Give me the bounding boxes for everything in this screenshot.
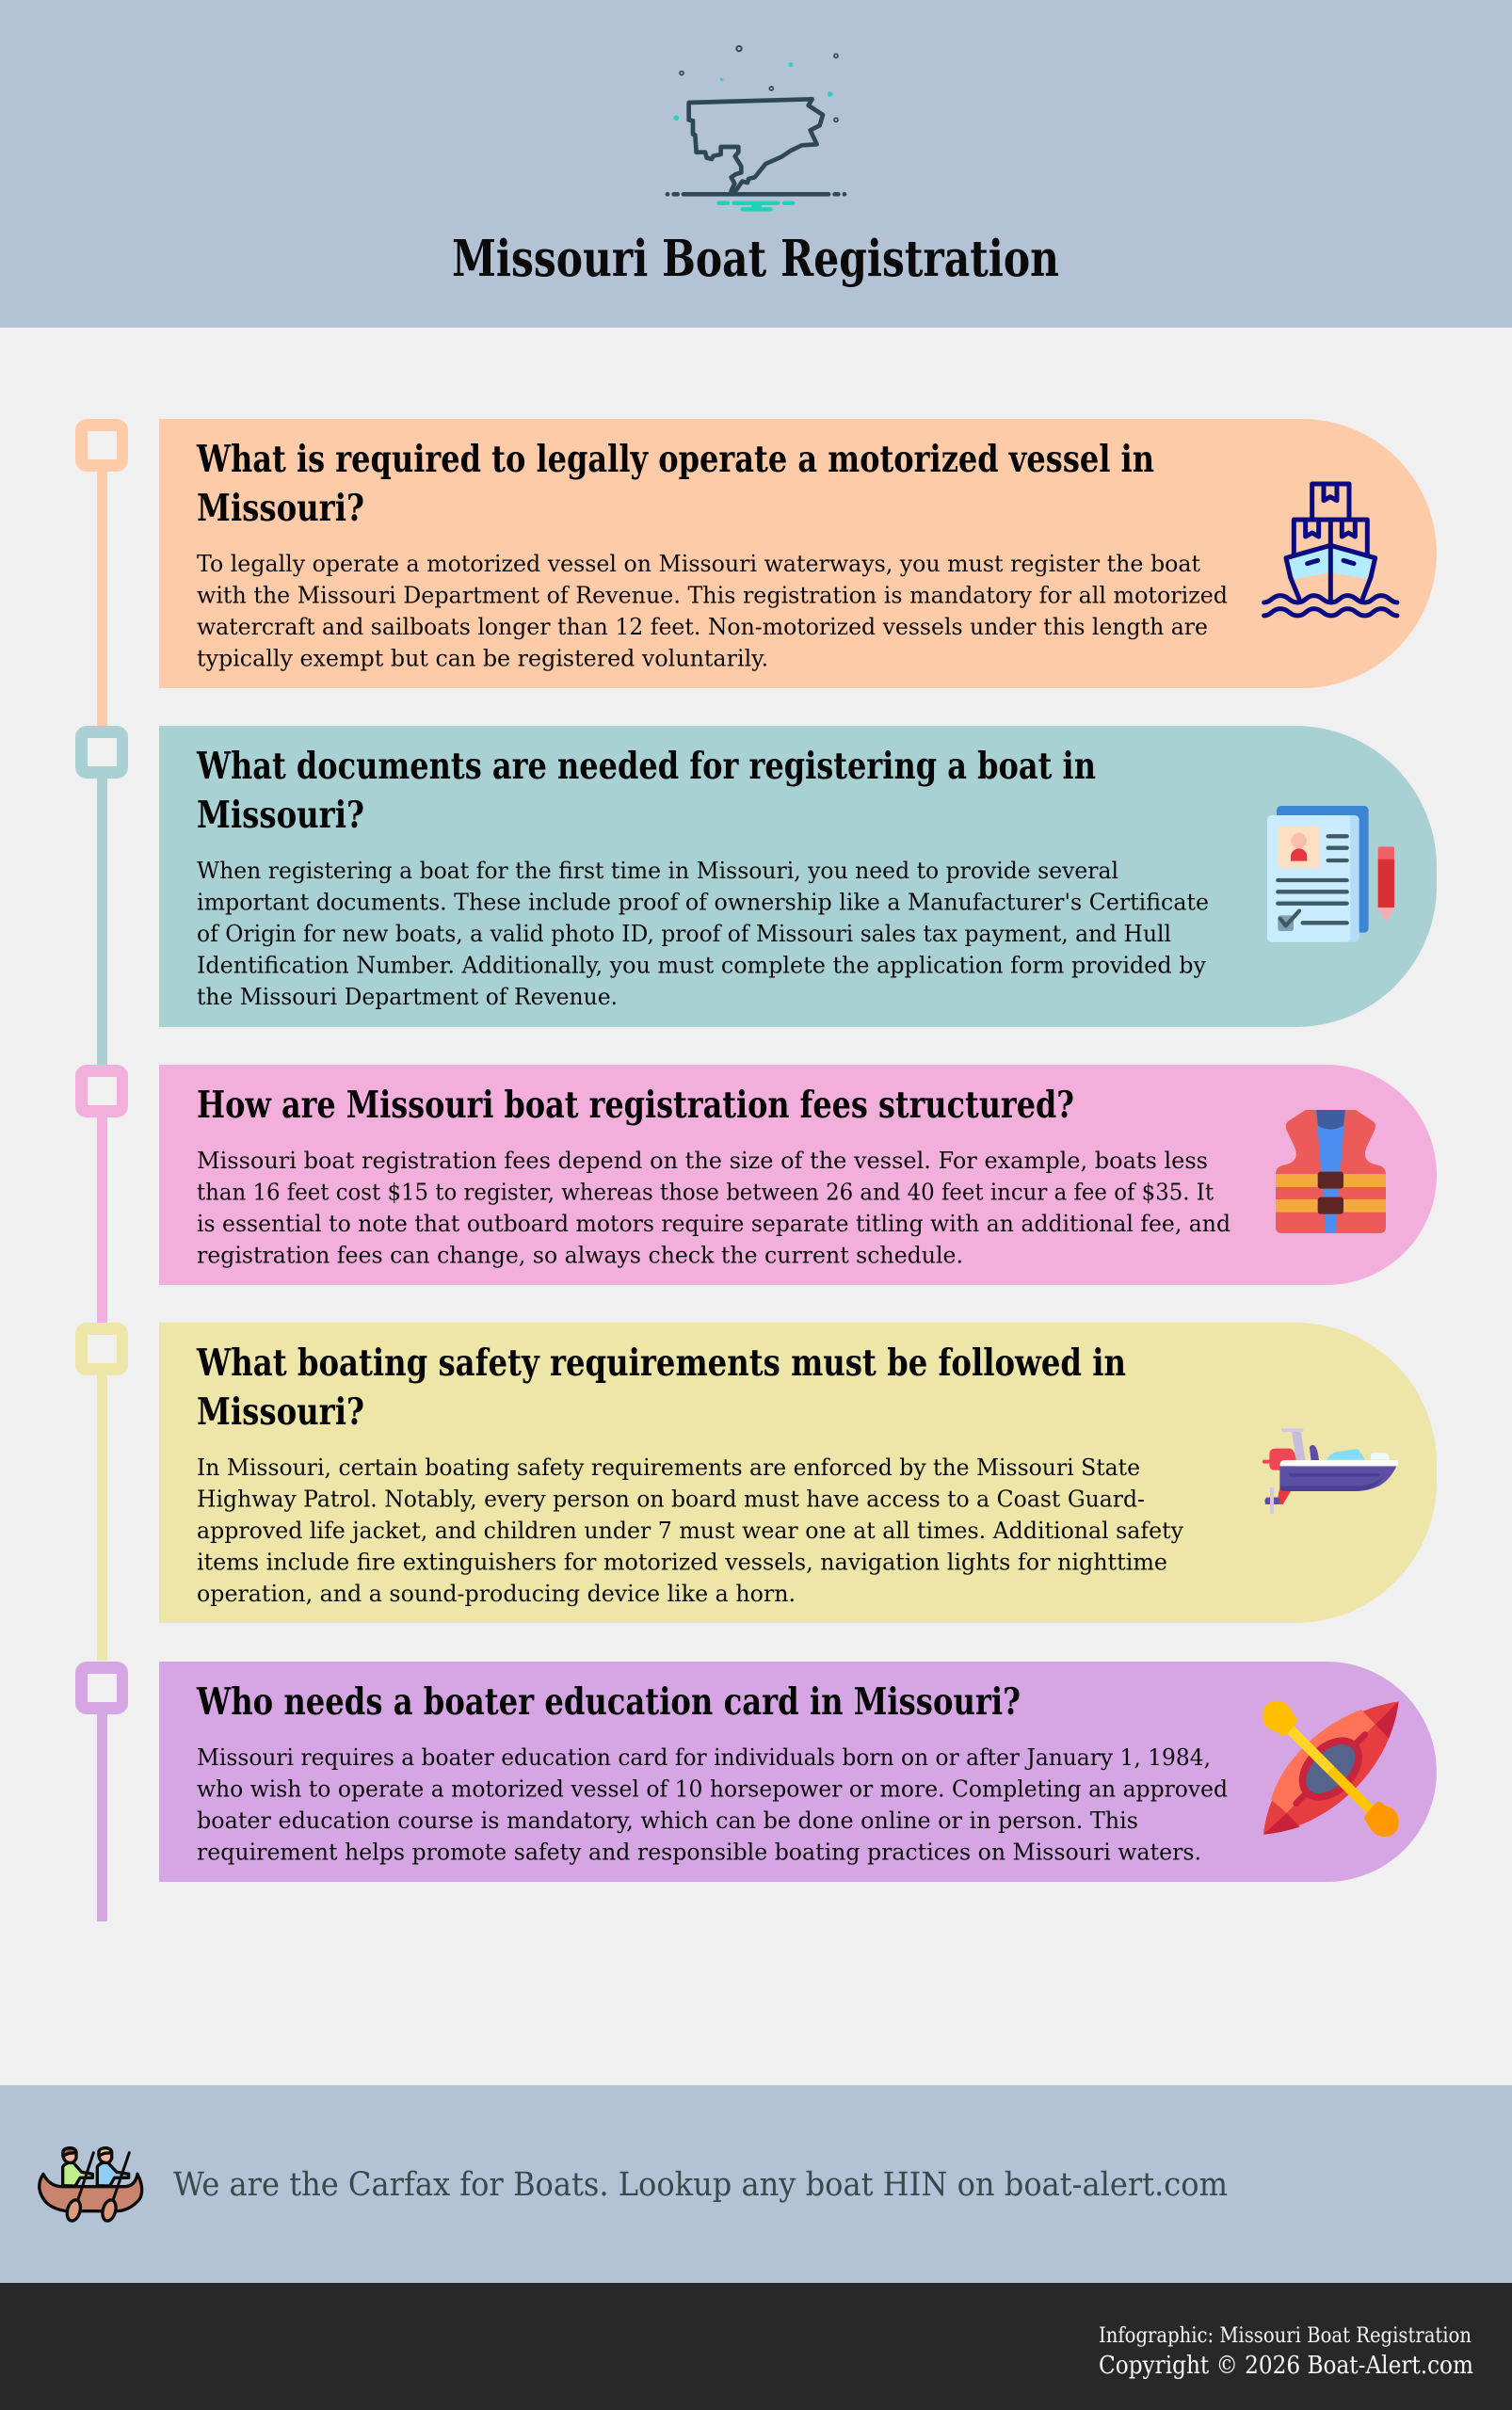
call to action text: We are the Carfax for Boats. Lookup any boat HIN on boat-alert.com: [173, 2166, 1228, 2204]
heading: boater education card: Who needs a boater education card in Missouri?: [196, 1680, 1021, 1724]
header band: [0, 0, 1512, 328]
icon: canoe with two paddlers: [40, 2148, 142, 2223]
timeline: [75, 419, 128, 1921]
icon: Missouri map: [668, 46, 844, 209]
text: safety requirements: Highway Patrol. Notably, every person on board must have access to a Coast Guard-: [197, 1486, 1145, 1512]
text: safety requirements: In Missouri, certain boating safety requirements are enforced by the Missouri State: [197, 1454, 1140, 1481]
text: safety requirements: approved life jacket, and children under 7 must wear one at all times. Additional safety: [197, 1517, 1183, 1544]
text: operating requirements: with the Missouri Department of Revenue. This registration is mandatory for all motorized: [197, 582, 1228, 608]
heading: operating requirements: What is required to legally operate a motorized vessel in: [196, 438, 1154, 481]
text: operating requirements: watercraft and sailboats longer than 12 feet. Non-motorized vessels under this length are: [197, 613, 1208, 640]
text: registration fees: is essential to note that outboard motors require separate titling with an additional fee, and: [197, 1210, 1231, 1237]
text: required documents: important documents. These include proof of ownership like a Manufacturer's Certificate: [197, 889, 1209, 915]
heading: safety requirements: What boating safety requirements must be followed in: [196, 1342, 1126, 1385]
panel: safety requirements: [159, 1323, 1437, 1623]
icon: cargo ship: [1264, 484, 1397, 616]
text: registration fees: registration fees can change, so always check the current schedule.: [197, 1241, 963, 1269]
title: Missouri Boat Registration: [452, 230, 1059, 288]
heading: required documents: [196, 745, 1096, 837]
text: required documents: the Missouri Department of Revenue.: [197, 983, 618, 1010]
text: required documents: When registering a boat for the first time in Missouri, you need to provide several: [197, 857, 1118, 884]
icon: documents and pencil: [1267, 806, 1394, 942]
text: safety requirements: items include fire extinguishers for motorized vessels, navigation lights for nighttime: [197, 1548, 1167, 1576]
heading: registration fees: How are Missouri boat registration fees structured?: [197, 1084, 1074, 1127]
text: required documents: [197, 857, 1209, 1010]
text: registration fees: than 16 feet cost $15 to register, whereas those between 26 and 40 feet incur a fee of $35. It: [197, 1179, 1214, 1205]
text: registration fees: [197, 1147, 1231, 1269]
heading: operating requirements: [196, 438, 1154, 530]
text: registration fees: Missouri boat registration fees depend on the size of the vessel. For example, boats less: [197, 1147, 1208, 1174]
text: operating requirements: [197, 550, 1228, 672]
copyright line: Copyright © 2026 Boat-Alert.com: [1099, 2352, 1473, 2380]
panel: registration fees: [159, 1065, 1437, 1285]
text: required documents: of Origin for new boats, a valid photo ID, proof of Missouri sales tax payment, and Hull: [197, 920, 1171, 947]
copyright footer: [0, 2283, 1512, 2410]
text: safety requirements: operation, and a sound-producing device like a horn.: [197, 1580, 796, 1607]
panel: boater education card: [159, 1662, 1437, 1882]
icon: kayak with paddle: [1263, 1701, 1399, 1837]
text: boater education card: Missouri requires a boater education card for individuals born on or after January 1, 1984,: [197, 1743, 1211, 1771]
text: boater education card: who wish to operate a motorized vessel of 10 horsepower or more. Completing an approved: [197, 1775, 1228, 1802]
heading: required documents: Missouri?: [197, 794, 364, 837]
heading: required documents: What documents are needed for registering a boat in: [196, 745, 1096, 788]
heading: safety requirements: Missouri?: [197, 1390, 364, 1434]
icon: motorboat: [1263, 1428, 1398, 1514]
icon: life jacket: [1276, 1110, 1386, 1233]
call to action band: [0, 2085, 1512, 2283]
text: operating requirements: typically exempt but can be registered voluntarily.: [197, 644, 768, 672]
text: safety requirements: [197, 1454, 1183, 1607]
text: boater education card: requirement helps promote safety and responsible boating practices on Missouri waters.: [197, 1838, 1201, 1866]
heading: operating requirements: Missouri?: [197, 487, 364, 530]
panel: required documents: [159, 726, 1437, 1027]
text: boater education card: boater education course is mandatory, which can be done online or in person. This: [197, 1807, 1138, 1834]
credit line: Infographic: Missouri Boat Registration: [1099, 2324, 1472, 2348]
text: operating requirements: To legally operate a motorized vessel on Missouri waterways, you must register the boat: [197, 550, 1200, 577]
text: boater education card: [197, 1743, 1228, 1866]
heading: safety requirements: [196, 1342, 1126, 1434]
panel: operating requirements: [159, 419, 1437, 688]
text: required documents: Identification Number. Additionally, you must complete the application form provided by: [197, 951, 1206, 979]
